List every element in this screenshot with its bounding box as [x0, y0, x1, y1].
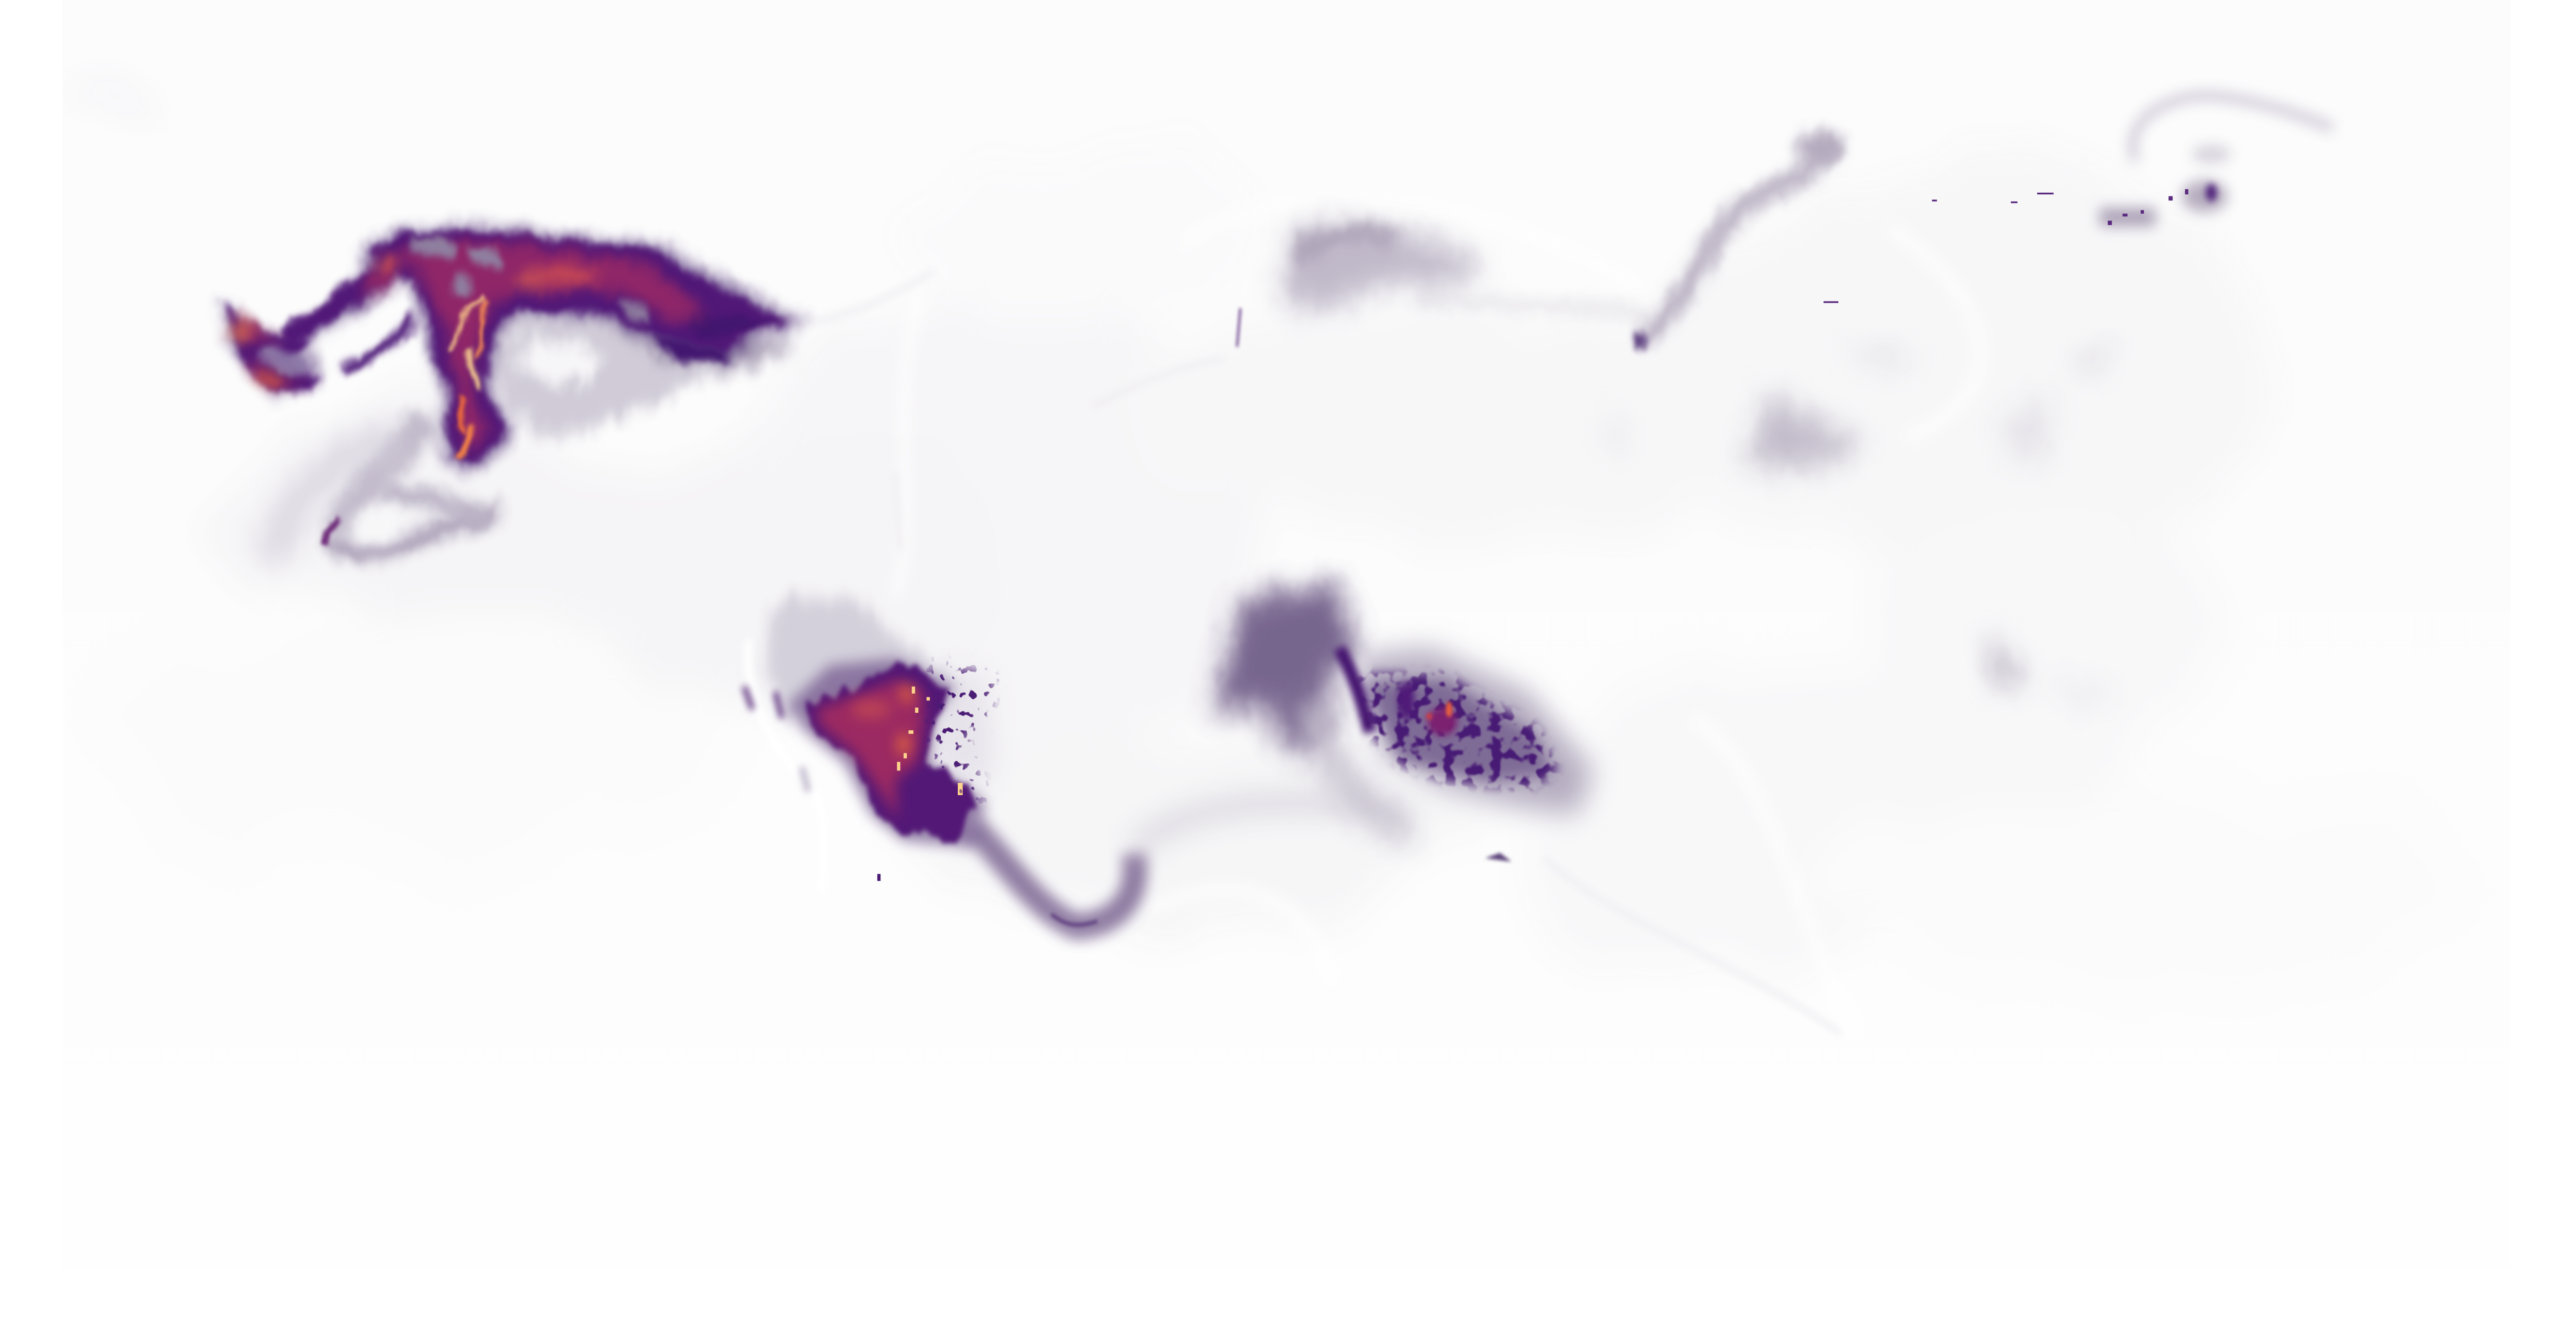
halo [789, 659, 986, 848]
speckled body [1357, 674, 1557, 788]
orange core [851, 685, 913, 755]
purple underlay [1364, 680, 1552, 781]
dark patches east [649, 312, 772, 364]
coastal dark strip [744, 686, 782, 718]
dark purple body [279, 228, 792, 466]
swirl ring [329, 505, 496, 551]
plume: African grey blob [1212, 585, 1413, 832]
plume: south american haze [764, 595, 953, 718]
lone speck [877, 874, 880, 881]
small coastal streak [802, 767, 808, 792]
plume: North Pacific mass [220, 223, 808, 473]
small dark mark south [1485, 853, 1512, 862]
swirl dark tip [328, 520, 340, 546]
magenta interior [815, 680, 923, 819]
swirl wide fade [271, 434, 394, 560]
plume: rising band [1633, 131, 1843, 350]
dark purple left arm [225, 301, 322, 392]
outer haze [1355, 648, 1594, 814]
dark purple body [805, 664, 979, 841]
plume: lower swirl below North Pacific mass [271, 421, 496, 560]
swirl lower trail [1413, 298, 1643, 312]
south american fringe haze [920, 674, 994, 797]
magenta spots [1398, 681, 1457, 735]
band head [1798, 131, 1843, 163]
orange spots [1426, 701, 1452, 720]
plume: South American tail [973, 802, 1380, 927]
bright sparks [897, 686, 963, 795]
lighter gaps in mass [411, 235, 651, 322]
bright yellow filaments [450, 298, 488, 459]
tail upper branch [1133, 802, 1380, 849]
plume: South American mass [789, 659, 995, 881]
thin grey filaments [805, 272, 1840, 1033]
swirl upper arc [381, 493, 486, 522]
dark ridge [1339, 648, 1370, 732]
scattered specks [926, 665, 995, 802]
orange core patches [228, 256, 600, 383]
magenta interior [240, 238, 706, 452]
cluster west haze [2099, 208, 2156, 226]
side margins [0, 0, 62, 1323]
dark thin line [1237, 308, 1241, 347]
map bottom fade [62, 1270, 2510, 1323]
blob wake [1314, 700, 1413, 832]
pale wake under the mass [489, 308, 799, 438]
white streak beside coast [748, 639, 823, 893]
swirl band [337, 421, 430, 534]
dark streak in curl [342, 315, 412, 368]
band dark spot [1633, 333, 1646, 350]
faint background haze [49, 61, 2464, 998]
white wisps across the haze [895, 200, 1980, 1033]
plume: north-east cluster [1824, 96, 2333, 303]
plume: asian grey patches [1610, 342, 2120, 709]
cluster specks [1824, 189, 2188, 303]
tail darker edge [1052, 914, 1097, 925]
plume: central swirl [1278, 223, 1643, 312]
plume: African speckled mass [1339, 648, 1594, 862]
outer halo [220, 223, 808, 473]
swirl white centre [351, 508, 398, 543]
